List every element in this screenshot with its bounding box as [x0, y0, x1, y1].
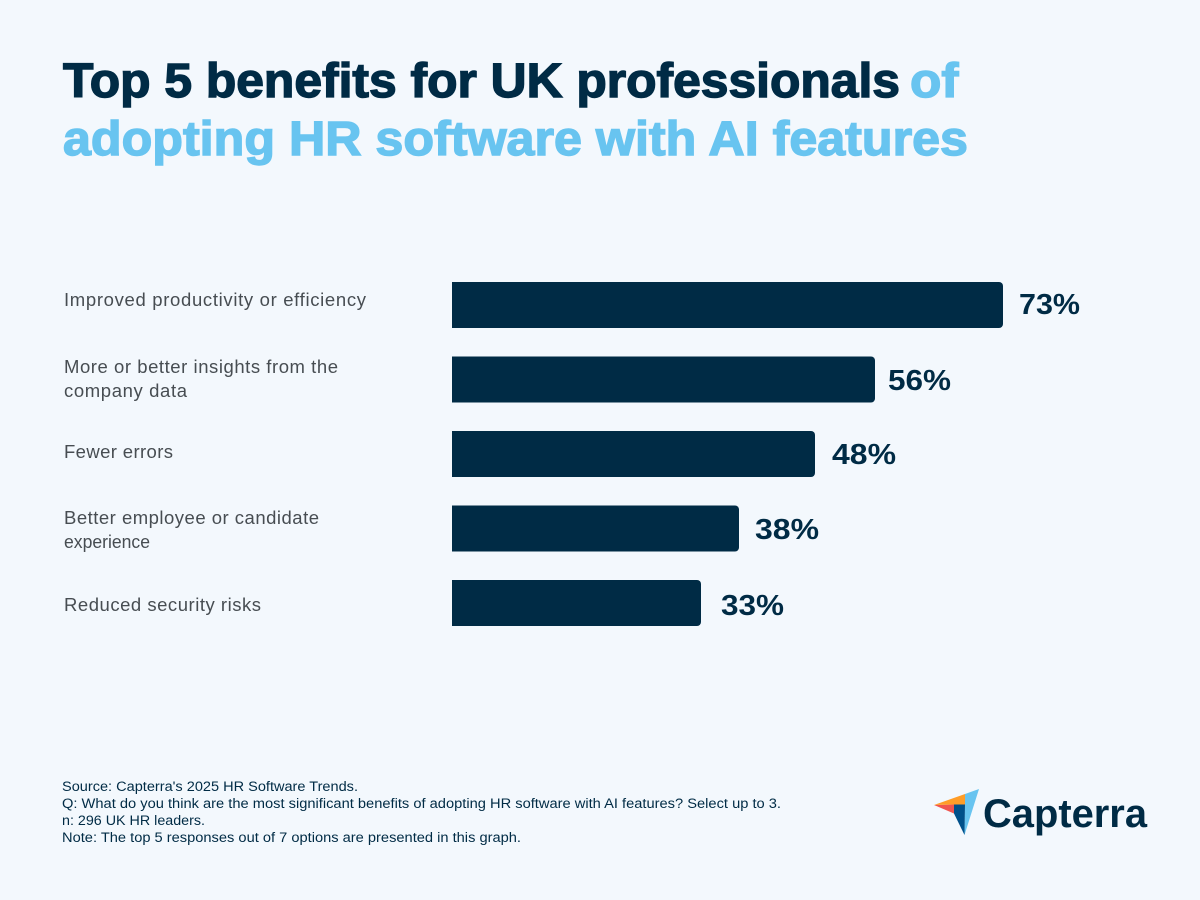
logo: Capterra: Capterra — [983, 792, 1148, 836]
row: reduced security risks: Reduced security risks — [64, 594, 261, 615]
source notes: n: 296 UK HR leaders. — [62, 813, 205, 828]
row: better experience — [64, 506, 819, 552]
row: improved productivity: Improved productivity or efficiency — [64, 289, 367, 310]
source notes: Note: The top 5 responses out of 7 options are presented in this graph. — [62, 830, 521, 845]
row: better insights: company data — [64, 380, 188, 401]
icon: Capterra arrow — [934, 789, 979, 835]
row: reduced security risks — [64, 580, 784, 626]
source notes: Q: What do you think are the most significant benefits of adopting HR software with AI features? Select up to 3. — [62, 796, 781, 811]
row: better experience: experience — [64, 531, 150, 552]
row: better insights: More or better insights from the — [64, 356, 338, 377]
row: improved productivity: 73% — [1019, 289, 1080, 321]
title: of — [910, 55, 960, 108]
row: reduced security risks: 33% — [721, 590, 784, 622]
source notes: Source: Capterra's 2025 HR Software Trends. — [62, 779, 358, 794]
row: better insights: 56% — [888, 365, 951, 397]
row: fewer errors — [64, 431, 896, 477]
row: improved productivity — [64, 282, 1080, 328]
row: better insights — [64, 356, 951, 402]
row: better experience: 38% — [755, 514, 819, 546]
row: better experience: Better employee or candidate — [64, 507, 319, 528]
title: Top 5 benefits for UK professionals — [63, 55, 900, 108]
title — [63, 55, 968, 166]
row: fewer errors: Fewer errors — [64, 441, 173, 462]
row: fewer errors: 48% — [832, 439, 896, 471]
title: adopting HR software with AI features — [63, 113, 968, 166]
source notes — [62, 779, 781, 845]
bar chart — [64, 282, 1080, 626]
